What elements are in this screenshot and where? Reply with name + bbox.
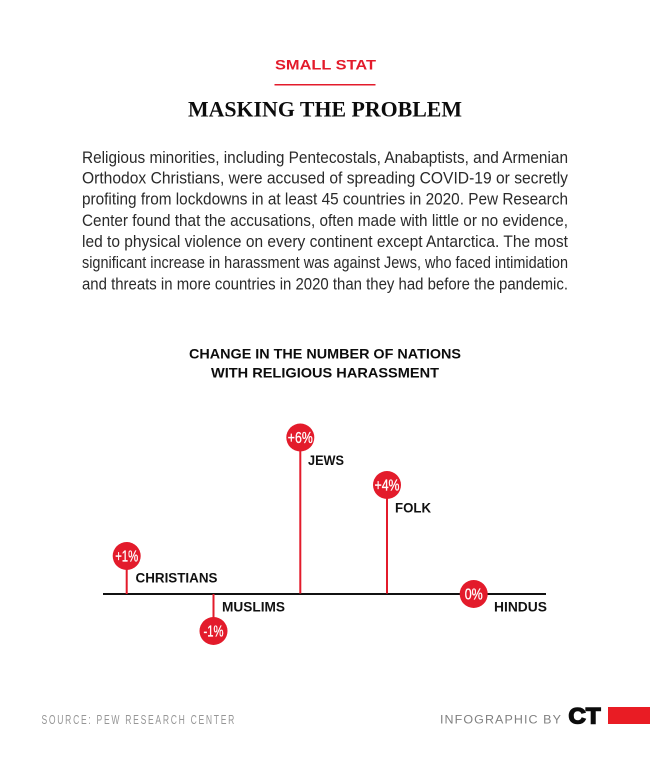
source note: SOURCE: PEW RESEARCH CENTER	[42, 713, 236, 728]
body paragraph: Center found that the accusations, often made with little or no evidence,	[82, 212, 568, 230]
axis line	[103, 593, 546, 595]
marker: christians +1%: +1%	[115, 548, 138, 566]
chart heading	[189, 346, 461, 380]
body paragraph: profiting from lockdowns in at least 45 countries in 2020. Pew Research	[82, 190, 568, 208]
kicker: small stat	[274, 58, 377, 86]
credit: infographic by CT: CT	[568, 704, 601, 728]
body paragraph: Religious minorities, including Pentecostals, Anabaptists, and Armenian	[82, 149, 568, 167]
body paragraph: significant increase in harassment was against Jews, who faced intimidation	[82, 254, 568, 272]
body paragraph: and threats in more countries in 2020 than they had before the pandemic.	[82, 276, 568, 294]
marker: christians +1%	[113, 542, 218, 594]
marker: hindus 0%: 0%	[465, 586, 483, 604]
credit: infographic by CT	[440, 704, 650, 728]
marker: folk +4%	[373, 471, 431, 594]
chart heading: WITH RELIGIOUS HARASSMENT	[211, 364, 439, 380]
marker: christians +1%: CHRISTIANS	[136, 570, 218, 586]
lollipop chart	[103, 424, 547, 645]
title: MASKING THE PROBLEM	[188, 96, 462, 122]
marker: muslims -1%: -1%	[204, 624, 224, 640]
body paragraph: led to physical violence on every continent except Antarctica. The most	[82, 233, 568, 251]
marker: jews +6%	[286, 424, 344, 594]
body paragraph: Orthodox Christians, were accused of spreading COVID-19 or secretly	[82, 170, 569, 188]
marker: hindus 0%	[460, 580, 547, 614]
chart heading: CHANGE IN THE NUMBER OF NATIONS	[189, 346, 461, 362]
marker: folk +4%: FOLK	[395, 500, 431, 516]
marker: folk +4%: +4%	[374, 478, 400, 494]
marker: muslims -1%	[200, 594, 285, 645]
kicker: small stat: SMALL STAT	[275, 58, 377, 72]
marker: jews +6%: JEWS	[308, 453, 344, 468]
marker: muslims -1%: MUSLIMS	[222, 600, 285, 614]
marker: jews +6%: +6%	[288, 430, 313, 447]
body paragraph	[82, 149, 569, 294]
marker: hindus 0%: HINDUS	[494, 600, 547, 614]
credit: infographic by CT: INFOGRAPHIC BY	[440, 714, 562, 726]
